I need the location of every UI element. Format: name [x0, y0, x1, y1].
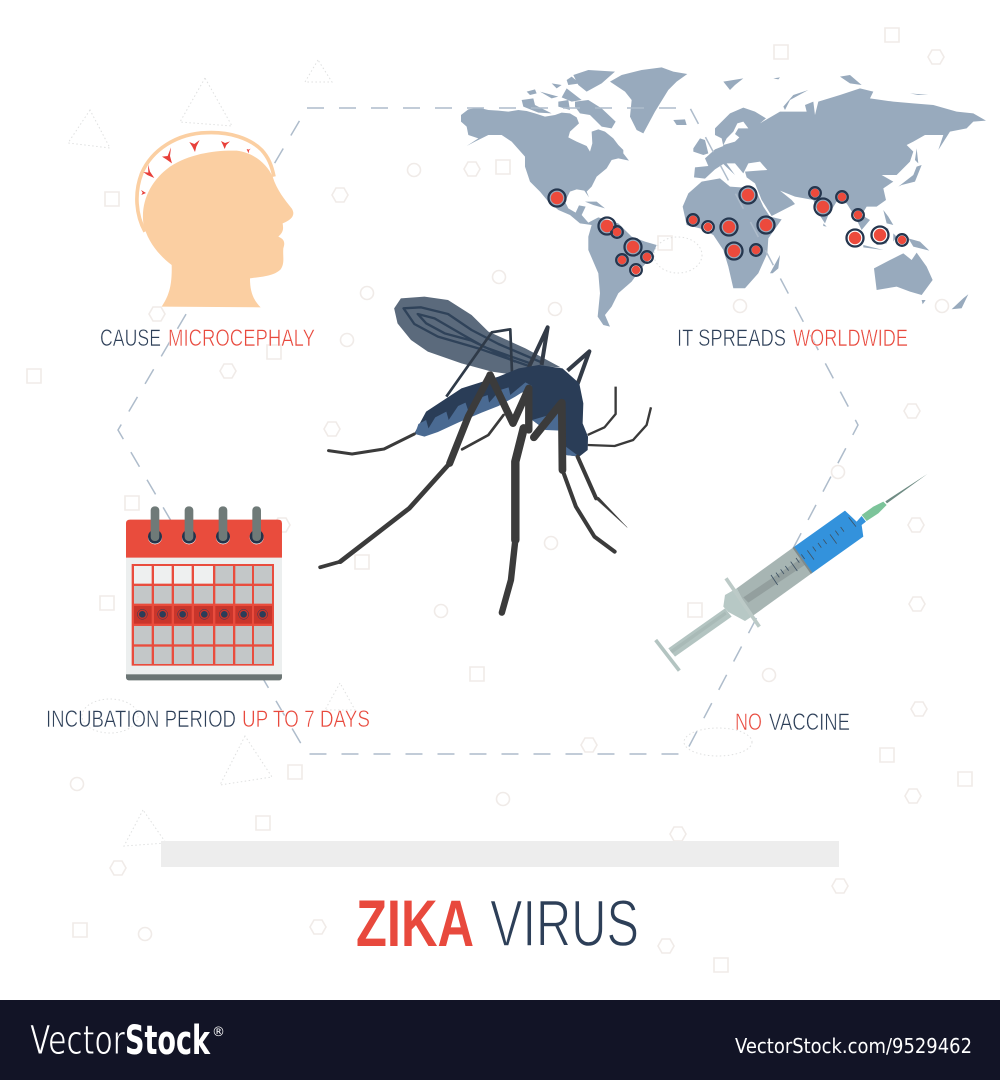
icon: syringe [656, 474, 927, 671]
label: no vaccine: VACCINE [769, 709, 850, 736]
title [356, 886, 639, 960]
footer logo [30, 1018, 225, 1064]
footer url: VectorStock.com/9529462 [735, 1034, 972, 1058]
label: cause microcephaly: MICROCEPHALY [168, 325, 315, 352]
thin rear legs [446, 327, 651, 446]
red pressure arrows [141, 140, 251, 195]
footer logo: Stock [125, 1018, 211, 1064]
label: incubation period: INCUBATION PERIOD [46, 706, 236, 733]
label: it spreads worldwide: WORLDWIDE [793, 325, 908, 352]
label: it spreads worldwide [677, 325, 908, 352]
calendar grid [132, 564, 274, 666]
icon: calendar [126, 506, 282, 680]
label: cause microcephaly [100, 325, 315, 352]
world map with outbreak markers [118, 67, 986, 754]
label: incubation period: UP TO 7 DAYS [242, 706, 370, 733]
grey divider bar [161, 841, 839, 867]
title: VIRUS [490, 886, 639, 960]
footer bar [0, 1000, 1000, 1080]
title: ZIKA [356, 886, 474, 960]
label: it spreads worldwide: IT SPREADS [677, 325, 786, 352]
binder rings [148, 506, 264, 544]
icon: head with microcephaly [137, 133, 293, 307]
illustration: mosquito [320, 297, 651, 613]
outbreak markers [548, 186, 908, 276]
footer logo: Vector [30, 1018, 125, 1064]
dashed hexagon frame [118, 108, 858, 754]
label: no vaccine: NO [735, 709, 762, 736]
land: americas [461, 67, 687, 327]
footer logo: ® [212, 1025, 225, 1040]
label: cause microcephaly: CAUSE [100, 325, 161, 352]
wing [394, 297, 561, 374]
label: no vaccine [735, 709, 850, 736]
body [414, 365, 588, 457]
legs [320, 375, 627, 613]
land: eurasia, africa, oceania [683, 75, 986, 309]
